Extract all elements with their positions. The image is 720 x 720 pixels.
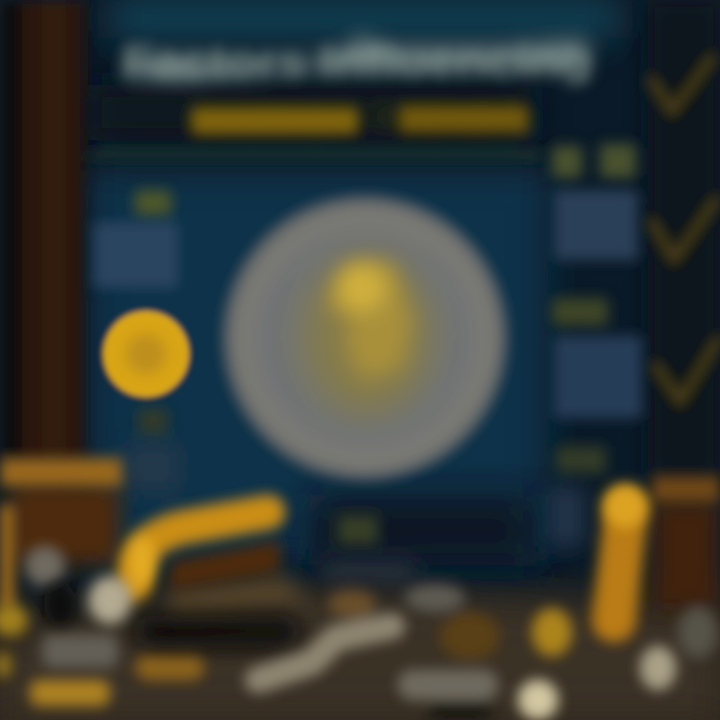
right stack body [652,500,720,610]
silver coin left [25,546,65,586]
subtitle bar right [400,106,528,132]
check mark 3 [656,340,718,402]
center bottom silver coins [258,584,558,720]
bottom center label [325,515,415,584]
gold piece left [0,604,28,636]
right paragraph 2 [554,336,642,418]
gold piece small [136,654,204,680]
silver coin far right [678,606,718,658]
right side gold check marks [652,58,718,402]
gold coin center [440,612,500,660]
left label [135,190,171,216]
right paragraph 3 [548,486,584,546]
left lower label [138,408,168,436]
right paragraph 1 [554,190,638,260]
bar shadow body [170,540,280,590]
bar highlight [134,512,268,585]
curved gold bar [88,512,310,648]
left stack body [10,484,120,564]
bar bright spot [128,536,156,588]
check mark 1 [652,58,712,112]
right label 1 [552,144,636,178]
right stack gold column [614,510,626,620]
subtitle text: MARKET TRENDS [190,101,530,139]
cream coin [518,680,558,720]
coin gold glow [308,257,428,413]
gold piece bottom [30,680,110,706]
right label 2 [552,298,608,326]
silver chain [258,626,392,680]
right stack top [652,476,720,502]
black shadow under bar [135,616,300,648]
silver end [88,576,132,624]
silver upper [405,584,465,612]
subtitle bar left [192,108,358,134]
copper coin [328,590,376,618]
silver lower [398,670,498,700]
divider line [90,151,540,158]
coin highlight [338,264,386,312]
right stack bright top [603,484,647,528]
coin disc [223,196,507,480]
dark under [430,700,490,720]
coin gold symbol [325,262,412,380]
background panels [88,0,720,565]
wooden post on left [0,0,84,460]
right column text blocks [548,144,642,546]
subtitle [190,101,530,139]
silver coin right [640,646,676,690]
left paragraph [94,222,178,288]
bottom table surface [0,590,720,720]
title [122,36,592,86]
bar tan base [165,575,310,620]
right stack base coin [532,608,572,656]
gold medallion [103,311,189,397]
title glow [125,36,588,80]
left stack top [0,458,122,486]
left column text block [94,190,189,492]
left lower paragraph [125,442,180,492]
left stack edge [0,505,14,610]
right label 3 [556,446,606,474]
check mark 2 [652,200,716,260]
central coin [223,196,507,480]
title text: Factors Influencing [122,37,592,86]
dark gap [44,582,76,626]
left stack of gold coins [0,458,204,706]
right stack of gold coins [532,476,720,690]
